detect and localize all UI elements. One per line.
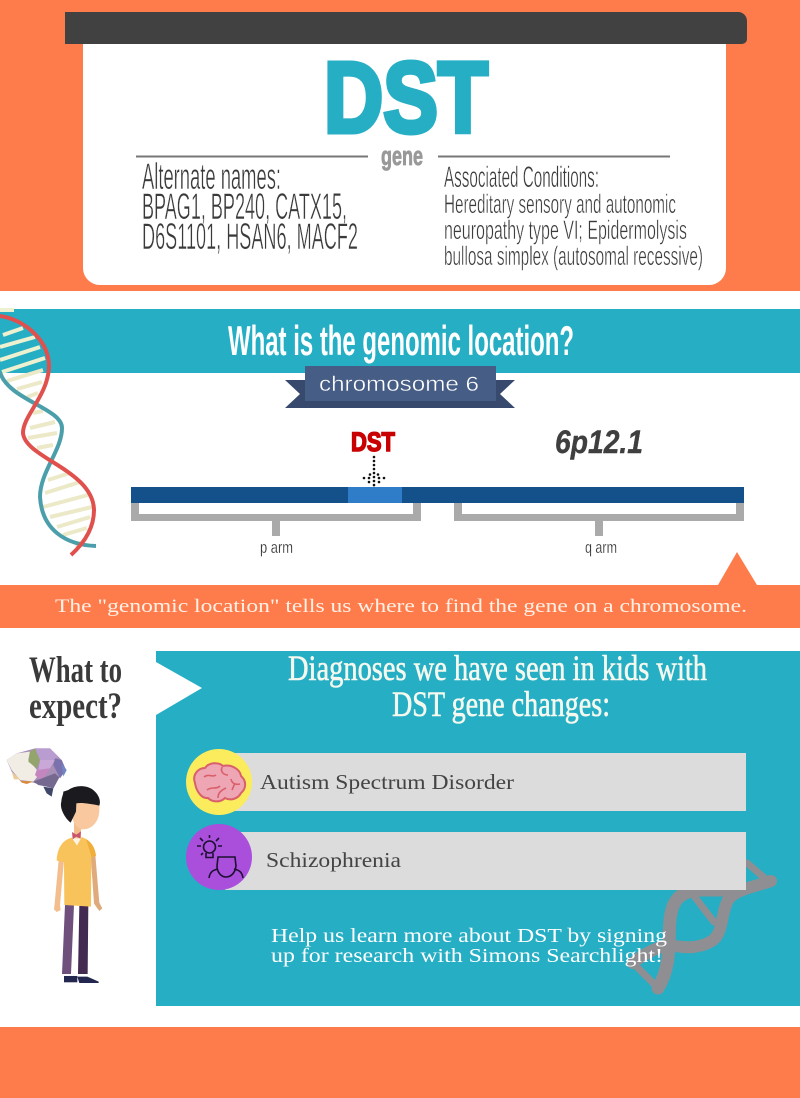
- gene label: DST: DST: [351, 427, 395, 457]
- row: schizophrenia: Schizophrenia: [266, 848, 402, 872]
- legs: [62, 905, 74, 974]
- bracket: q arm: q arm: [585, 538, 617, 557]
- icon: brain: [194, 763, 245, 801]
- neck: [74, 822, 81, 838]
- DNA illustration: colour helix: [0, 310, 96, 555]
- call to action: Help us learn more about DST by signing: [271, 925, 667, 947]
- title: DST: DST: [324, 42, 488, 154]
- diagnoses panel: [156, 648, 800, 1006]
- alternate names: BPAG1, BP240, CATX15,: [142, 186, 347, 227]
- ribbon: chromosome 6: chromosome 6: [319, 373, 479, 396]
- heading: what to expect: expect?: [29, 686, 122, 727]
- subtitle: gene: gene: [381, 141, 423, 171]
- header panel: [0, 0, 800, 291]
- associated conditions: Associated Conditions:: [444, 161, 599, 194]
- row: schizophrenia: [186, 824, 746, 890]
- hair: [61, 786, 100, 823]
- collar: [73, 838, 80, 845]
- associated conditions: [444, 161, 703, 271]
- illustration: brain: [7, 748, 67, 797]
- head: [72, 802, 99, 829]
- white card: [83, 40, 726, 285]
- caption band: The "genomic location" tells us where to find the gene on a chromosome.: [55, 596, 747, 617]
- panel heading: DST gene changes:: [392, 684, 610, 724]
- icon: lightbulb and head: [197, 835, 243, 878]
- chromosome bar: [131, 487, 744, 503]
- shirt: [57, 837, 96, 907]
- panel heading: [288, 648, 707, 724]
- row: autism: Autism Spectrum Disorder: [260, 770, 514, 794]
- panel pointer: [156, 662, 202, 715]
- dark top bar: [65, 12, 747, 44]
- divider right: [438, 156, 670, 158]
- divider left: [136, 156, 368, 158]
- dotted arrow: [363, 456, 385, 489]
- arms: [54, 860, 64, 912]
- call to action: up for research with Simons Searchlight!: [271, 945, 663, 967]
- alternate names: [142, 156, 358, 257]
- heading: what to expect: [29, 650, 122, 727]
- alternate names: Alternate names:: [142, 156, 281, 197]
- shoes: [64, 976, 77, 982]
- footer band: [0, 1027, 800, 1098]
- grey DNA motif: [633, 863, 771, 988]
- ribbon: chromosome 6: [285, 366, 515, 408]
- bracket: p arm: p arm: [260, 538, 293, 557]
- bracket: p arm: [131, 503, 421, 557]
- bracket: q arm: [454, 503, 744, 557]
- call to action: [271, 925, 667, 967]
- row: autism: [186, 749, 746, 815]
- header panel: D6S1101, HSAN6, MACF2: [142, 216, 358, 257]
- locus label: 6p12.1: 6p12.1: [555, 424, 643, 460]
- illustration: person: [54, 786, 102, 983]
- caption band: [0, 552, 800, 628]
- location banner: [0, 309, 800, 373]
- heading: what to expect: What to: [29, 650, 122, 691]
